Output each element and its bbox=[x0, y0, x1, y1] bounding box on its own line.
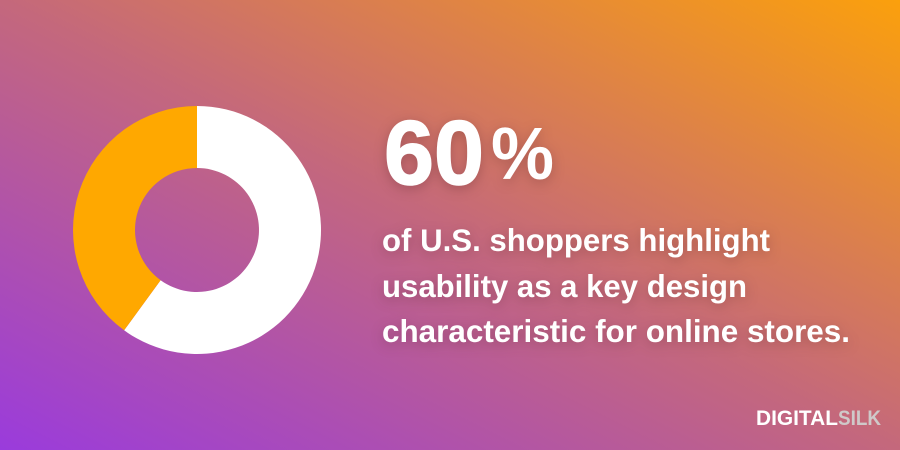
description text: of U.S. shoppers highlight bbox=[382, 222, 771, 258]
description text: usability as a key design bbox=[382, 268, 747, 304]
donut segment: 60 percent white bbox=[124, 106, 321, 354]
donut chart: 60 percent bbox=[73, 106, 321, 354]
brand logo bbox=[756, 406, 881, 430]
headline statistic bbox=[384, 103, 554, 204]
headline statistic: 60 bbox=[384, 103, 484, 204]
brand logo: SILK bbox=[838, 406, 881, 430]
headline statistic: % bbox=[491, 112, 554, 195]
donut segment: 40 percent amber bbox=[73, 106, 197, 330]
brand logo: DIGITAL bbox=[756, 406, 838, 430]
description text bbox=[382, 222, 850, 349]
description text: characteristic for online stores. bbox=[382, 313, 850, 349]
